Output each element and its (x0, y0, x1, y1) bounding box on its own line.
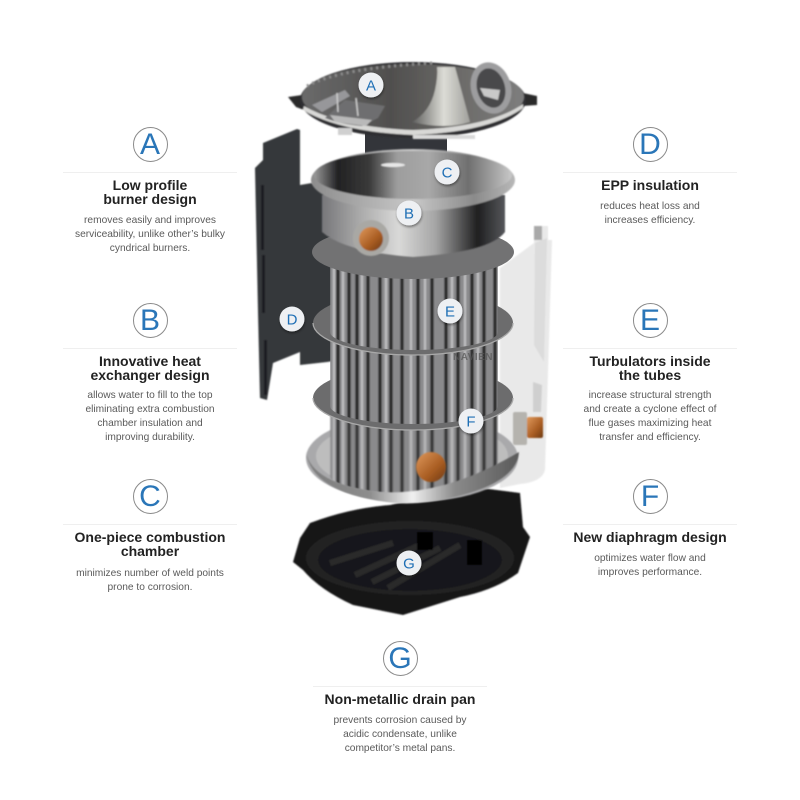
burner plate A (288, 58, 537, 139)
badge D: D (287, 312, 298, 328)
panel: A low profile burner design: serviceability, unlike other’s bulky (75, 229, 225, 240)
badge G (396, 550, 422, 576)
panel: D EPP insulation: increases efficiency. (605, 215, 695, 226)
panel: B innovative heat exchanger design (63, 303, 237, 443)
panel: C one-piece combustion chamber: chamber (121, 543, 179, 559)
panel: E turbulators inside the tubes: transfer and efficiency. (599, 432, 701, 443)
exploded heat exchanger illustration (254, 60, 552, 616)
badge C: C (442, 164, 453, 182)
panel: A low profile burner design: cyndrical burners. (110, 243, 190, 254)
right translucent insulation (500, 226, 552, 488)
badge A: A (366, 78, 376, 94)
panel: C one-piece combustion chamber: C (139, 480, 161, 512)
bottom ring front band (306, 452, 519, 503)
panel: B innovative heat exchanger design: Innovative heat (99, 353, 201, 369)
badge B: B (404, 206, 414, 222)
panel: F new diaphragm design: New diaphragm design (573, 529, 727, 545)
panel: C one-piece combustion chamber: minimizes number of weld points (76, 568, 224, 578)
panel: B innovative heat exchanger design: B (140, 304, 160, 336)
diaphragm disk upper (312, 225, 514, 279)
panel: B innovative heat exchanger design: improving durability. (105, 432, 195, 443)
diaphragm disk lower (313, 366, 513, 430)
left insulation panel D (255, 129, 340, 400)
panel: B innovative heat exchanger design: allows water to fill to the top (87, 390, 213, 400)
panel: D EPP insulation: D (639, 128, 661, 160)
panel: B innovative heat exchanger design: exchanger design (90, 367, 210, 383)
combustion chamber C (311, 149, 515, 257)
panel: G non-metallic drain pan: G (388, 642, 412, 674)
bottom ring back and lower tube section (305, 415, 518, 503)
panel: D EPP insulation: EPP insulation (601, 177, 699, 193)
brand mark: NAVIEN (453, 352, 493, 363)
badge G: G (403, 556, 415, 572)
panel: G non-metallic drain pan (313, 641, 487, 754)
badge E (438, 298, 462, 324)
panel: A low profile burner design: removes easily and improves (84, 215, 216, 226)
panel: C one-piece combustion chamber (63, 479, 237, 593)
middle tube section (330, 340, 498, 424)
callout badges on the illustration (280, 72, 484, 576)
burner support bracket (365, 132, 447, 156)
diaphragm disk middle (313, 291, 513, 355)
badge E: E (445, 304, 455, 320)
badge F: F (466, 414, 476, 430)
panel: F new diaphragm design (563, 479, 737, 578)
panel: E turbulators inside the tubes: E (640, 304, 660, 336)
badge D (280, 306, 304, 332)
panel: B innovative heat exchanger design: chamber insulation and (97, 418, 203, 429)
panel: G non-metallic drain pan: Non-metallic drain pan (325, 691, 475, 707)
panel: F new diaphragm design: F (641, 480, 659, 512)
panel: E turbulators inside the tubes: and create a cyclone effect of (584, 404, 716, 415)
upper tube section (330, 266, 498, 350)
panel: G non-metallic drain pan: competitor’s metal pans. (345, 743, 455, 754)
panel: E turbulators inside the tubes: flue gases maximizing heat (589, 418, 711, 429)
panel: F new diaphragm design: optimizes water flow and (594, 553, 706, 564)
badge F (458, 408, 484, 434)
copper fittings (353, 220, 543, 482)
panel: B innovative heat exchanger design: eliminating extra combustion (85, 404, 215, 415)
badge C (434, 160, 460, 184)
panel: A low profile burner design: burner design (103, 191, 197, 207)
panel: G non-metallic drain pan: prevents corrosion caused by (333, 715, 467, 726)
panel: C one-piece combustion chamber: prone to corrosion. (108, 582, 192, 593)
panel: E turbulators inside the tubes (563, 303, 737, 443)
panel: A low profile burner design: Low profile (113, 177, 187, 193)
panel: D EPP insulation: reduces heat loss and (600, 201, 700, 212)
panel: D EPP insulation (563, 127, 737, 226)
panel: G non-metallic drain pan: acidic condensate, unlike (343, 729, 457, 740)
drain pan G (293, 487, 530, 615)
panel: E turbulators inside the tubes: increase structural strength (589, 390, 711, 400)
panel: C one-piece combustion chamber: One-piece combustion (75, 529, 225, 545)
badge A (358, 72, 384, 98)
badge B (396, 200, 422, 226)
panel: A low profile burner design (63, 127, 237, 254)
panel: E turbulators inside the tubes: Turbulators inside (589, 353, 711, 369)
panel: E turbulators inside the tubes: the tubes (619, 367, 681, 383)
panel: F new diaphragm design: improves performance. (598, 567, 702, 578)
panel: A low profile burner design: A (140, 128, 160, 160)
